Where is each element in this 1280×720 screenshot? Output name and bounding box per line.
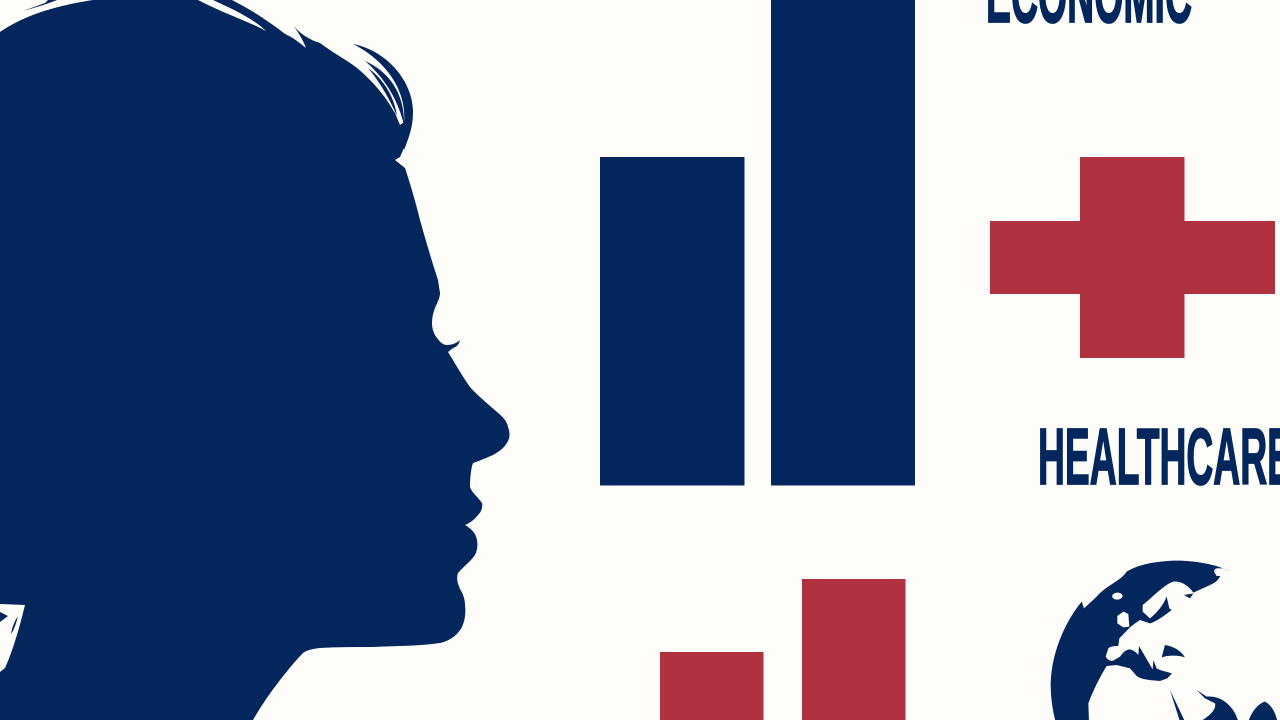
bar chart: red bars (660, 579, 906, 720)
globe: caspian and black sea (1162, 593, 1193, 657)
hair strand top left (23, 0, 57, 11)
icon: globe (1051, 561, 1277, 720)
hair strands (353, 44, 413, 150)
hair highlights (198, 0, 412, 157)
globe: iceland and britain (1112, 593, 1129, 627)
icon: medical cross (990, 157, 1275, 358)
icon: head silhouette in profile (0, 0, 510, 720)
globe: southern seas (1170, 690, 1277, 720)
collar highlight (0, 604, 25, 672)
bar chart: navy bars (600, 0, 915, 486)
